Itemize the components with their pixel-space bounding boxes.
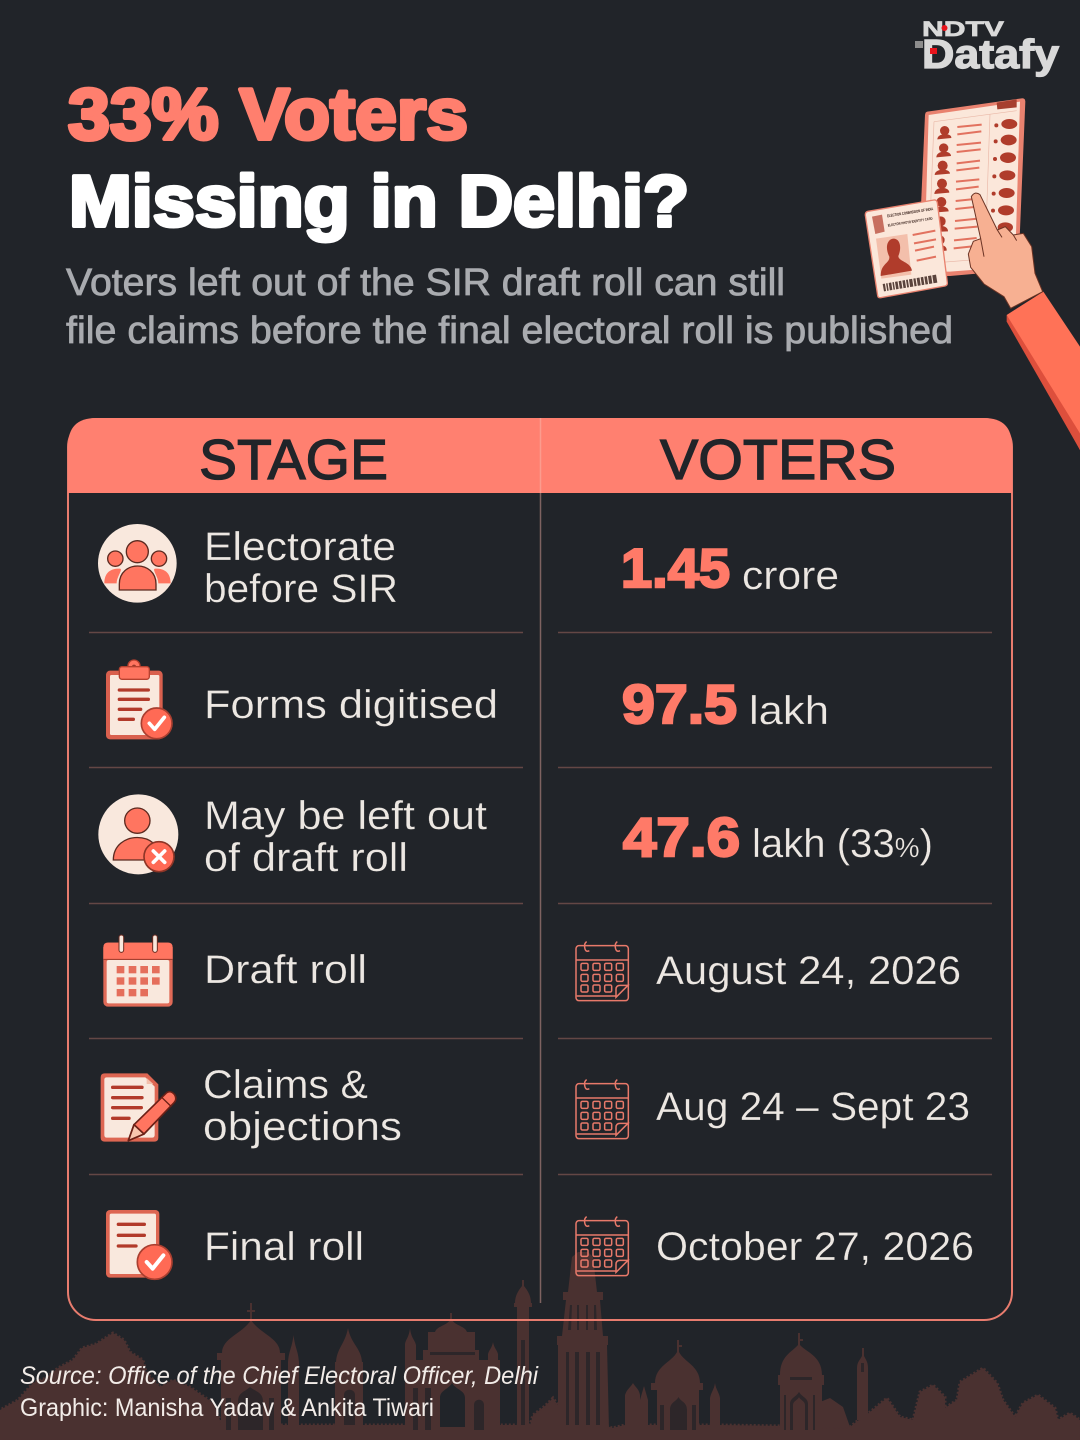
skyline silhouette	[0, 1252, 1080, 1440]
ground and trees	[0, 1333, 1080, 1440]
voter card: ELECTION COMMISSION OF INDIA	[887, 206, 934, 218]
small dome	[335, 1328, 363, 1430]
illustration: voting machine, voter card and hand	[865, 98, 1080, 450]
small minaret left	[288, 1335, 299, 1430]
subtitle: Voters left out of the SIR draft roll can still	[66, 262, 785, 304]
central building	[405, 1313, 500, 1430]
value: 1.45 crore: crore	[742, 554, 839, 598]
voting machine	[918, 98, 1025, 276]
table panel	[68, 418, 1012, 1320]
table header: VOTERS	[660, 428, 896, 492]
subtitle: file claims before the final electoral roll is published	[66, 310, 953, 352]
source and credits: Source: Office of the Chief Electoral Officer, Delhi	[20, 1362, 539, 1390]
dome left	[217, 1303, 285, 1430]
icon: person with cross	[98, 794, 178, 874]
stage: may be left out of draft roll	[204, 794, 487, 880]
icon: small calendar Aug 24 - Sept 23	[576, 1080, 628, 1139]
value: 1.45 crore	[621, 537, 839, 599]
value: 47.6 lakh (33%): 47.6	[623, 806, 740, 868]
subtitle	[66, 262, 953, 352]
value: Aug 24 to Sept 23: Aug 24 – Sept 23	[656, 1085, 970, 1129]
title: 33% Voters	[68, 75, 468, 155]
stage: claims and objections: objections	[203, 1105, 402, 1149]
value: October 27, 2026: October 27, 2026	[656, 1225, 974, 1269]
row dividers	[89, 632, 992, 1174]
title: Missing in Delhi?	[69, 162, 689, 242]
logo: NDTV Datafy: Datafy	[922, 31, 1059, 77]
skyline window cut-outs	[226, 1305, 864, 1430]
value: 97.5 lakh	[622, 673, 829, 735]
stage: electorate before SIR: Electorate	[204, 525, 396, 569]
value: 97.5 lakh: lakh	[749, 689, 829, 733]
stage: draft roll: Draft roll	[204, 948, 367, 992]
logo: NDTV Datafy: NDTV	[922, 18, 1004, 41]
table header	[68, 418, 1012, 493]
column divider	[540, 493, 542, 1303]
hand	[968, 193, 1043, 308]
stage: claims and objections: Claims &	[203, 1063, 368, 1107]
sleeve	[1007, 292, 1080, 450]
icon: calendar	[103, 935, 173, 1007]
icon: final document with check	[106, 1210, 172, 1279]
value: August 24, 2026: August 24, 2026	[656, 949, 961, 993]
icon: small calendar August 24	[576, 942, 628, 1001]
icon: document with pencil	[101, 1073, 176, 1142]
stage: final roll: Final roll	[204, 1225, 364, 1269]
value: 97.5 lakh: 97.5	[622, 673, 737, 735]
minaret right	[857, 1348, 868, 1420]
table outline	[68, 419, 1012, 1320]
domes right	[625, 1340, 720, 1430]
minaret	[514, 1280, 532, 1430]
table header: STAGE	[199, 428, 388, 492]
voter card: ELECTOR PHOTO IDENTITY CARD	[888, 217, 933, 228]
stage: electorate before SIR: before SIR	[204, 567, 398, 611]
icon: clipboard with check	[106, 660, 172, 739]
source and credits: Graphic: Manisha Yadav & Ankita Tiwari	[20, 1394, 434, 1422]
title	[68, 75, 689, 242]
qutub minar	[557, 1252, 609, 1430]
stage: may be left out of draft roll: May be left out	[204, 794, 487, 838]
stage: forms digitised: Forms digitised	[204, 683, 498, 727]
icon: small calendar October 27	[576, 1217, 628, 1276]
value: 47.6 lakh (33%)	[623, 806, 933, 868]
value: 47.6 lakh (33%): lakh (33%)	[752, 822, 933, 866]
voter card	[865, 200, 947, 298]
value: 1.45 crore: 1.45	[621, 537, 730, 599]
stage: claims and objections	[203, 1063, 402, 1149]
icon: group of people	[98, 524, 177, 603]
stage: electorate before SIR	[204, 525, 398, 611]
logo: NDTV Datafy	[915, 18, 1059, 77]
stage: may be left out of draft roll: of draft roll	[204, 836, 408, 880]
source and credits	[20, 1362, 539, 1422]
